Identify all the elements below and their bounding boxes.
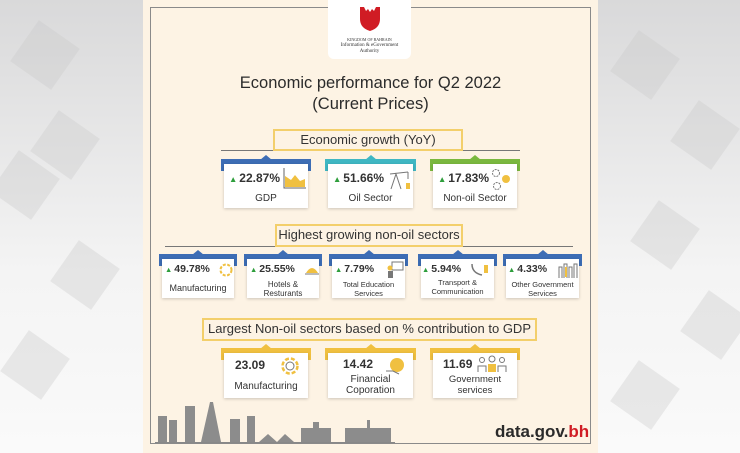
icon: chart <box>284 168 306 188</box>
card: Other gov <box>503 250 582 300</box>
logo box: Information & eGovernment <box>341 43 398 48</box>
card: Government: services <box>458 385 492 396</box>
card: Oil: ▲51.66% <box>333 171 384 185</box>
card: Education <box>329 250 408 300</box>
card: GDP: GDP <box>255 193 277 204</box>
card: Manufacturing growth <box>159 250 237 300</box>
card: GDP <box>221 155 311 210</box>
icon: emblem <box>360 7 380 31</box>
card: Manufacturing growth: ▲49.78% <box>165 263 210 275</box>
card: Education: ▲7.79% <box>335 263 374 275</box>
icon: gear <box>281 357 299 375</box>
card: Hotels <box>244 250 322 300</box>
card: Financial <box>325 344 416 400</box>
card: Non-oil <box>430 155 520 210</box>
icon: cloche <box>305 268 319 274</box>
card: Education: Total Education <box>343 280 394 289</box>
card: Oil: Oil Sector <box>349 193 392 204</box>
icon: buildings <box>558 264 578 278</box>
heading: highest growing: Highest growing non-oil sectors <box>278 227 460 242</box>
icon: gear <box>220 264 232 276</box>
icon: phone <box>471 264 488 276</box>
card: Non-oil: ▲17.83% <box>438 171 489 185</box>
section: highest growing <box>165 246 573 247</box>
icon: teacher <box>388 262 404 278</box>
card: Other gov: ▲4.33% <box>508 263 547 275</box>
card: Transport <box>418 250 497 300</box>
skyline <box>155 402 395 443</box>
card: Transport: ▲5.94% <box>422 263 461 275</box>
card: GDP: ▲22.87% <box>229 171 280 185</box>
heading: Economic growth <box>273 129 463 151</box>
title: (Current Prices) <box>312 95 429 113</box>
logo box <box>328 0 411 59</box>
card: Hotels: Resturants <box>264 289 302 298</box>
card: Government: 11.69 <box>443 357 472 371</box>
icon: oil pump <box>390 172 410 190</box>
card: Education: Services <box>354 289 383 298</box>
section: economic growth <box>221 150 520 151</box>
card: Government <box>430 344 520 400</box>
card: Transport: Transport & <box>438 278 477 287</box>
card: Transport: Communication <box>431 287 484 296</box>
card: Financial: 14.42 <box>343 357 373 371</box>
icon: people <box>478 356 506 372</box>
card: Oil <box>325 155 416 210</box>
heading: largest: Largest Non-oil sectors based on % contribution to GDP <box>208 321 531 336</box>
logo box: Authority <box>360 49 379 54</box>
card: Manufacturing growth: Manufacturing <box>169 283 227 293</box>
icon: money bag <box>386 358 404 374</box>
logo text: data.gov.bh: data.gov.bh <box>495 422 589 441</box>
card: Other gov: Services <box>528 289 557 298</box>
card: Hotels: ▲25.55% <box>250 263 295 275</box>
logo box: KINGDOM OF BAHRAIN <box>347 37 392 42</box>
card: Other gov: Other Government <box>511 280 574 289</box>
card: Manufacturing share: Manufacturing <box>234 381 298 392</box>
card: Hotels: Hotels & <box>268 280 298 289</box>
heading: Economic growth: Economic growth (YoY) <box>300 132 436 147</box>
card: Financial: Coporation <box>346 385 395 396</box>
panel background <box>143 0 598 453</box>
title <box>240 74 501 113</box>
card: Manufacturing share: 23.09 <box>235 358 265 372</box>
card: Manufacturing share <box>221 344 311 400</box>
title: Economic performance for Q2 2022 <box>240 74 501 92</box>
section: largest <box>221 340 520 341</box>
heading: highest growing <box>275 224 463 247</box>
icon: gears <box>492 169 510 190</box>
card: Financial: Financial <box>350 374 391 385</box>
card: Government: Government <box>449 374 501 385</box>
card: Non-oil: Non-oil Sector <box>443 193 507 204</box>
heading: largest <box>202 318 537 341</box>
